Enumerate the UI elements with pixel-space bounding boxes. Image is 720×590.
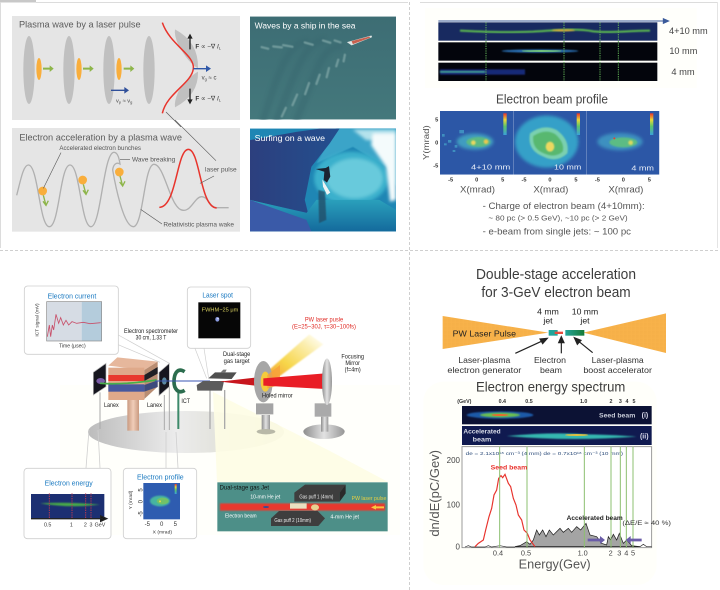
electron beam line <box>155 379 210 382</box>
stage labels: boost accelerator <box>583 365 652 375</box>
noise baseline <box>465 544 652 547</box>
profile Y ticks: 0 <box>138 499 144 503</box>
stage labels: Laser-plasma <box>458 355 511 365</box>
jet nozzles <box>290 503 319 510</box>
strip: accelerated beam: (ii) <box>640 433 649 440</box>
profile X ticks: 5 <box>174 522 178 528</box>
wave velocity label: g <box>205 76 207 81</box>
PW laser pulse label: PW laser pusle <box>305 317 344 324</box>
phase velocity label: p <box>119 99 122 104</box>
optics labels <box>223 351 364 400</box>
X axis ticks: -5 <box>521 177 527 183</box>
target poles <box>210 390 225 429</box>
PW laser pulse label <box>292 317 356 330</box>
force labels: L <box>219 97 222 102</box>
phase velocity label: ≈ v <box>121 98 130 104</box>
gas puff 1 <box>294 485 346 502</box>
inset heading: Dual-stage gas Jet <box>220 486 269 492</box>
panel: electron beam profile heatmaps <box>421 111 659 236</box>
holed mirror mount <box>256 403 275 434</box>
callout: electron profile <box>123 468 197 539</box>
energy ticks: 1 <box>70 522 73 528</box>
magnet <box>100 357 158 400</box>
wave labels: Relativistic plasma wake <box>163 222 234 229</box>
ICT axis labels <box>34 303 86 350</box>
X axis ticks: 0 <box>548 177 552 183</box>
inset labels <box>225 495 386 524</box>
inset labels: Gas puff 1 (4mm) <box>299 495 334 501</box>
photo: waves by a ship <box>250 16 396 120</box>
laser optics group <box>195 317 364 439</box>
inset labels: 4-mm He jet <box>330 514 360 520</box>
heatmap: 10 mm <box>513 111 586 175</box>
dual-stage gas target <box>197 370 237 391</box>
beam charge notes: ~ 80 pc (> 0.5 GeV), ~10 pc (> 2 GeV) <box>488 214 628 223</box>
profile Y ticks: 5 <box>138 488 144 492</box>
X axis ticks: -5 <box>595 177 600 183</box>
jet labels: jet <box>579 315 590 325</box>
stage labels: Laser-plasma <box>592 355 644 365</box>
lanex and ICT labels: Lanex <box>104 402 119 409</box>
x ticks: 5 <box>631 548 635 557</box>
wave velocity label: ≈ c <box>207 75 216 81</box>
profile Y ticks: -5 <box>138 511 144 517</box>
y ticks: 0 <box>456 543 461 552</box>
force labels: F ∝ −∇ I <box>195 95 219 102</box>
wave labels: laser pulse <box>205 167 237 174</box>
panel: double-stage acceleration <box>443 267 666 375</box>
plasma ellipses <box>23 36 155 104</box>
optics labels: Mirror <box>345 360 360 367</box>
spectrum labels <box>491 464 671 527</box>
main red beam <box>263 373 325 389</box>
spectrum chart <box>428 447 671 571</box>
energy scale: 3 <box>619 399 622 405</box>
beam charge notes <box>483 201 645 236</box>
stage labels: electron generator <box>447 365 522 375</box>
spectrometer label <box>124 328 179 342</box>
plasma wake curve <box>17 152 229 227</box>
spectrum labels: Seed beam <box>491 464 528 471</box>
profile Y ticks <box>128 488 144 517</box>
lanex and ICT labels: ICT <box>181 398 190 405</box>
strip: 4 mm <box>438 63 657 81</box>
phase velocity arrow <box>111 87 129 94</box>
y ticks <box>447 456 461 552</box>
strip: accelerated beam <box>462 426 652 445</box>
jet labels: 4 mm <box>537 306 559 316</box>
inset: dual-stage gas jet <box>217 482 388 531</box>
heading: plasma wave: Plasma wave by a laser pulse <box>19 20 141 30</box>
laser beam in jet <box>220 503 385 511</box>
photo: surfing on a wave <box>250 128 396 232</box>
x ticks: 2 <box>609 548 613 557</box>
spectrometer label: 30 cm, 1.33 T <box>136 335 166 342</box>
electron beam bunch <box>263 506 269 508</box>
ICT coil <box>174 370 185 429</box>
leader lines: laser spot <box>195 348 209 378</box>
gas puff 2 <box>271 511 325 526</box>
heatmap: 4+10 mm: 4+10 mm <box>471 164 511 171</box>
pointer line: laser pulse <box>166 112 181 127</box>
lanex and ICT labels <box>104 398 190 409</box>
ICT plot <box>47 302 102 341</box>
Y axis label: Y(mrad) <box>421 125 431 160</box>
focused beam <box>220 378 255 386</box>
heatmap: 4+10 mm <box>440 111 514 175</box>
energy scale: 0.4 <box>499 399 506 405</box>
x ticks <box>493 548 635 557</box>
wave labels: Wave breaking <box>132 157 176 164</box>
heatmap: 4 mm: 4 mm <box>631 166 654 173</box>
inset labels: 10-mm He jet <box>250 495 281 501</box>
foam <box>353 130 396 202</box>
green arrows <box>43 65 134 72</box>
spectrometer group <box>93 328 210 431</box>
X axis ticks <box>448 177 651 183</box>
heading: electron energy spectrum: Electron energy spectrum <box>476 379 625 395</box>
energy scale: 0.5 <box>525 399 533 405</box>
x axis label: Energy(Gev) <box>519 557 591 571</box>
x ticks: 0.4 <box>493 548 503 557</box>
sea surface <box>250 200 396 231</box>
cream glow <box>60 385 400 535</box>
wave labels <box>59 145 237 229</box>
X axis ticks: 5 <box>574 177 578 183</box>
wave labels: Accelerated electron bunches <box>59 145 142 152</box>
surfer <box>316 166 330 195</box>
strip: 10 mm <box>438 42 657 61</box>
callout title: electron profile: Electron profile <box>137 472 184 481</box>
pulse label: PW Laser Pulse <box>453 328 516 338</box>
profile X ticks: X (mrad) <box>153 529 172 535</box>
profile heatmap <box>143 483 180 519</box>
inset labels: Gas puff 2 (10mm) <box>274 518 311 524</box>
wave lip <box>316 129 396 187</box>
PW laser beam <box>263 334 323 384</box>
seed beam spectrum <box>475 474 535 547</box>
spectrum labels: Accelerated beam <box>567 515 623 522</box>
right lanex screen <box>159 363 169 430</box>
y ticks: 100 <box>447 500 461 509</box>
strip: seed beam: (i) <box>642 413 648 420</box>
inset labels: PW laser pulse <box>352 496 386 502</box>
wave velocity label: v <box>202 75 205 81</box>
energy strip <box>31 493 104 518</box>
strip: 4+10 mm <box>438 22 657 41</box>
x ticks: 3 <box>617 548 621 557</box>
photo caption: surfing: Surfing on a wave <box>255 133 325 143</box>
optics labels: Focusing <box>341 353 364 360</box>
heading: double-stage acceleration: Double-stage acceleration <box>476 267 636 283</box>
electron arrows <box>43 176 125 205</box>
energy axis arrow <box>31 516 107 521</box>
electron bunches <box>38 168 124 195</box>
ship wake <box>262 40 345 119</box>
energy ticks: GeV <box>95 522 106 528</box>
tube <box>314 152 388 205</box>
leader lines: electron current <box>117 335 169 363</box>
left lanex screen <box>93 363 106 429</box>
heading: double-stage acceleration: for 3-GeV electron beam <box>481 285 631 301</box>
ship <box>347 35 372 45</box>
optics labels: Holed mirror <box>262 393 293 400</box>
foreground blue <box>250 200 311 231</box>
optics labels: Dual-stage <box>223 351 251 358</box>
energy scale: 1.0 <box>580 399 587 405</box>
surfer reflection <box>318 190 326 223</box>
energy axis arrow <box>438 19 669 23</box>
panel: electron acceleration by a plasma wave <box>12 120 240 232</box>
beam charge notes: - e-beam from single jets: ~ 100 pc <box>483 226 631 236</box>
panel: experimental setup <box>60 385 400 535</box>
energy spread arrows <box>588 536 642 544</box>
energy scale: 2 <box>610 399 613 405</box>
holed mirror <box>254 361 280 402</box>
right laser cone <box>583 313 666 353</box>
spectrum labels: (ΔE/E ≈ 40 %) <box>622 520 671 527</box>
X axis ticks: 0 <box>475 177 478 183</box>
lanex and ICT labels: Lanex <box>147 402 163 409</box>
photo caption: ship: Waves by a ship in the sea <box>255 21 356 31</box>
inset labels: Electron beam <box>225 513 257 519</box>
heading: double-stage acceleration <box>476 267 636 301</box>
strip labels: 4+10 mm <box>669 26 708 36</box>
heading: electron beam profile: Electron beam profile <box>496 92 608 106</box>
jet labels: jet <box>542 315 553 325</box>
density label: de = 2.1x10¹⁸ cm⁻³ (4 mm) de = 0.7x10¹⁸ cm⁻³ (10 mm) <box>466 451 623 457</box>
PW laser pulse label: (E=25~30J, τ=30~100fs) <box>292 323 356 330</box>
leader lines: lower callouts <box>86 430 178 468</box>
energy scale: 5 <box>633 399 636 405</box>
X axis ticks: 0 <box>622 177 625 183</box>
strip: accelerated beam: beam <box>473 438 491 444</box>
Y axis ticks: 0 <box>435 141 438 147</box>
optics labels: gas target <box>224 358 250 365</box>
callout: laser spot <box>187 287 251 348</box>
spectrometer label: Electron spectrometer <box>124 328 179 335</box>
phase velocity label: v <box>116 98 119 104</box>
magnet stem <box>127 399 139 431</box>
profile X ticks: 0 <box>160 522 164 528</box>
X axis labels: X(mrad) <box>533 184 568 194</box>
pointer arrows <box>515 337 593 353</box>
wave velocity arrow <box>193 65 211 72</box>
energy scale: (GeV) <box>457 399 472 405</box>
profile X ticks <box>145 522 178 535</box>
phase velocity label: g <box>130 99 132 104</box>
heading: electron acceleration: Electron acceleration by a plasma wave <box>19 133 182 143</box>
strip labels: 10 mm <box>669 46 697 56</box>
X axis ticks: -5 <box>448 177 453 183</box>
energy ticks: 0.5 <box>44 522 51 528</box>
energy ticks <box>44 522 106 528</box>
force arrows <box>187 34 193 104</box>
stage labels: beam <box>540 365 562 375</box>
panel: electron beam spectra strips <box>425 8 708 106</box>
X axis ticks: 5 <box>648 177 651 183</box>
X axis labels: X(mrad) <box>460 184 495 194</box>
Y axis ticks: 5 <box>435 118 438 124</box>
x ticks: 0.5 <box>521 548 531 557</box>
laser pulse curve <box>159 149 217 208</box>
yellow beam projection <box>213 392 388 482</box>
dark wave face <box>250 129 340 213</box>
cream glow <box>423 382 657 585</box>
focusing mirror <box>322 358 332 405</box>
accelerated beam spectrum <box>515 523 640 547</box>
panel: electron energy spectrum <box>423 379 657 585</box>
x ticks: 4 <box>624 548 628 557</box>
panel: plasma wave by a laser pulse <box>12 16 240 120</box>
strip: seed beam <box>462 406 652 424</box>
focusing mirror mount <box>303 403 345 439</box>
force labels: F ∝ −∇ I <box>195 44 219 51</box>
stage labels: Electron <box>534 355 566 365</box>
optical table <box>88 411 284 453</box>
profile X ticks: -5 <box>145 522 151 528</box>
ponderomotive crescents <box>175 29 198 107</box>
energy ticks: 2 <box>84 522 87 528</box>
callout title: electron current: Electron current <box>48 291 96 300</box>
optics labels: (f=4m) <box>345 367 361 374</box>
jet labels <box>537 306 598 325</box>
laser pulses <box>36 58 122 80</box>
energy scale <box>457 399 636 405</box>
strip: seed beam: Seed beam <box>599 413 636 420</box>
left laser cone <box>443 316 548 349</box>
callout title: electron energy: Electron energy <box>45 478 93 487</box>
stage labels <box>447 355 652 375</box>
energy marker lines <box>500 447 633 548</box>
callout title: laser spot: Laser spot <box>202 290 233 299</box>
heatmap: 10 mm: 10 mm <box>554 164 582 171</box>
beam charge notes: - Charge of electron beam (4+10mm): <box>483 201 645 211</box>
strip: accelerated beam: Accelerated <box>463 430 501 436</box>
profile Y ticks: Y (mrad) <box>128 490 134 509</box>
X axis labels: X(mrad) <box>608 184 643 194</box>
jet labels: 10 mm <box>572 306 598 316</box>
jets <box>549 330 584 336</box>
energy ticks: 3 <box>90 522 93 528</box>
ICT axis labels: Time (μsec) <box>59 344 86 350</box>
force labels: L <box>219 46 222 51</box>
energy scale: 4 <box>626 399 629 405</box>
red laser envelope <box>162 23 193 113</box>
callout: electron energy <box>24 468 111 539</box>
y axis label: dn/dE(pC/Gev) <box>428 450 442 537</box>
laser spot image <box>198 302 240 338</box>
X axis ticks: 5 <box>501 177 504 183</box>
heatmap: 4 mm <box>586 111 660 175</box>
y ticks: 200 <box>447 456 461 465</box>
green energy markers <box>486 22 618 81</box>
strip labels: 4 mm <box>671 67 695 77</box>
strip labels <box>669 26 708 77</box>
ICT axis labels: ICT signal (mV) <box>34 303 40 337</box>
callout: electron current <box>24 286 118 354</box>
leader lines <box>43 120 216 224</box>
spot size label: FWHM~25 μm <box>202 308 239 314</box>
Y axis ticks <box>433 118 438 169</box>
force labels <box>195 44 222 102</box>
X axis labels <box>460 184 643 194</box>
x ticks: 1.0 <box>578 548 588 557</box>
laser arrow <box>371 505 384 510</box>
Y axis ticks: -5 <box>433 163 438 169</box>
